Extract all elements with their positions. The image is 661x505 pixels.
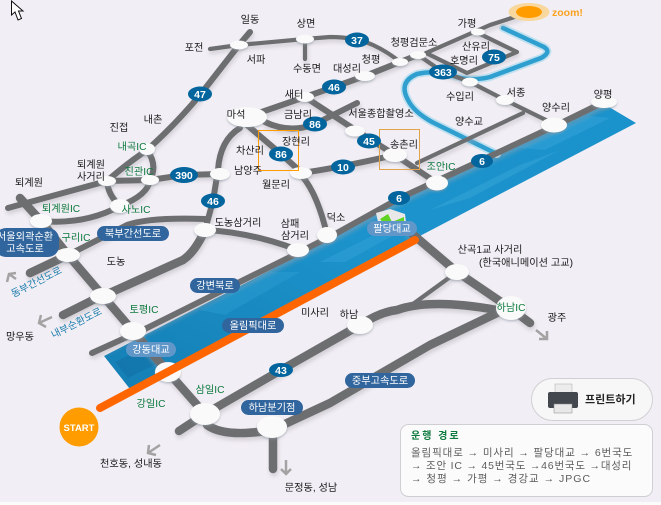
icon: Paldang bridge green marker — [376, 209, 406, 229]
place labels: 가평 — [458, 18, 476, 30]
road name pills: 중부고속도로 — [352, 375, 408, 387]
junctions — [30, 28, 617, 438]
place labels: 서종 — [507, 87, 525, 99]
route number badges: 37 — [351, 35, 363, 47]
direction arrows — [7, 273, 547, 474]
expressway labels: 내부순환도로 — [49, 305, 104, 341]
expressway labels — [9, 264, 104, 341]
road name pills: 팔당대교 — [373, 223, 411, 235]
place labels: 상면 — [297, 18, 315, 30]
place labels: 송촌리 — [390, 139, 418, 151]
road name pills: 올림픽대로 — [230, 320, 276, 332]
place labels: 청평검문소 — [391, 37, 437, 49]
place labels: 월문리 — [262, 179, 290, 191]
route number badges: 363 — [434, 67, 452, 79]
place labels: 진접 — [110, 122, 128, 134]
place labels: 망우동 — [6, 331, 34, 343]
interchange labels: 삼일IC — [196, 384, 224, 396]
route info box — [400, 424, 652, 496]
interchange labels: 조안IC — [427, 161, 455, 173]
place labels: 사거리 — [77, 171, 105, 183]
place labels: 양평 — [594, 89, 612, 101]
route line: Olympic-daero orange route — [100, 240, 415, 408]
place labels: 산유리 — [462, 41, 490, 53]
place labels: 수입리 — [446, 90, 474, 103]
route info box: → 조안 IC → 45번국도 →46번국도 →대성리 — [411, 460, 632, 472]
place labels: 금남리 — [284, 109, 312, 121]
route number badges: 6 — [479, 156, 485, 168]
place labels: 도농 — [107, 256, 125, 268]
road name pills: 북부간선도로 — [105, 228, 161, 240]
place labels: 차산리 — [236, 145, 264, 157]
place labels: 삼패 — [281, 218, 299, 230]
start marker: START — [64, 423, 95, 434]
medium roads — [8, 32, 604, 353]
interchange labels — [42, 141, 525, 410]
river: Han river — [104, 104, 636, 389]
route number badges: 75 — [488, 52, 500, 64]
place labels: 미사리 — [301, 307, 329, 319]
interchange labels: 강일IC — [137, 398, 165, 410]
place labels: (한국애니메이션 고교) — [479, 257, 573, 269]
wide roads — [20, 198, 530, 469]
road name pills: 강동대교 — [132, 344, 170, 356]
road name pills: 고속도로 — [6, 243, 44, 255]
route number badges: 10 — [337, 162, 349, 174]
route number badges: 46 — [328, 82, 340, 94]
highlight boxes — [258, 130, 420, 170]
place labels: 덕소 — [327, 212, 345, 224]
place labels: 청평 — [362, 54, 380, 66]
route info box: 운행 경로 — [411, 430, 461, 442]
place labels: 장현리 — [282, 136, 310, 148]
interchange labels: 퇴계원IC — [42, 203, 80, 215]
place labels: 천호동, 성내동 — [100, 458, 162, 470]
place labels: 대성리 — [333, 63, 361, 75]
river: Bukhan tributary — [405, 28, 547, 154]
interchange labels: 토평IC — [130, 304, 158, 316]
place labels: 포전 — [185, 42, 203, 54]
place labels: 양수교 — [455, 116, 483, 128]
interchange labels: 하남IC — [497, 301, 525, 314]
interchange labels: 진관IC — [125, 166, 153, 178]
route number badges: 47 — [194, 89, 206, 101]
interchange labels: 구리IC — [62, 232, 90, 244]
interchange labels: 사노IC — [122, 204, 150, 216]
place labels: 서파 — [247, 54, 266, 66]
route number badges: 390 — [175, 170, 193, 182]
place labels: 내촌 — [144, 114, 162, 126]
place labels: 양수리 — [542, 102, 570, 114]
route number badges — [170, 32, 506, 377]
print button — [532, 378, 652, 420]
route number badges: 43 — [275, 365, 287, 377]
route number badges: 45 — [363, 136, 375, 148]
icon: mouse cursor — [12, 1, 23, 20]
place labels: 퇴계원 — [15, 177, 43, 189]
place labels: 서울종합촬영소 — [348, 108, 414, 120]
place labels: 산곡1교 사거리 — [458, 244, 522, 256]
road name pills — [0, 221, 417, 415]
route number badges: 86 — [309, 119, 321, 131]
route info box: → 청평 → 가평 → 경강교 → JPGC — [411, 472, 591, 485]
road name pills: 강변북로 — [196, 280, 234, 292]
place labels: 마석 — [227, 109, 245, 121]
place labels: 퇴계원 — [77, 159, 105, 171]
route number badges: 86 — [275, 149, 287, 161]
zoom marker: zoom! — [552, 7, 583, 19]
place labels: 남양주 — [234, 165, 262, 177]
place labels: 수동면 — [293, 63, 321, 75]
route info box: 올림픽대로 → 미사리 → 팔당대교 → 6번국도 — [411, 447, 633, 459]
place labels: 일동 — [241, 14, 259, 26]
zoom marker — [508, 3, 583, 21]
place labels: 호명리 — [450, 55, 478, 67]
start marker — [60, 408, 98, 446]
place labels: 삼거리 — [281, 230, 309, 242]
route number badges: 46 — [207, 196, 219, 208]
place labels: 도농삼거리 — [215, 217, 261, 229]
thin roads — [210, 12, 554, 304]
expressway labels: 동부간선도로 — [9, 264, 64, 300]
place labels: 문정동, 성남 — [285, 482, 338, 494]
place labels: 광주 — [548, 312, 566, 324]
road name pills: 하남분기점 — [249, 401, 295, 414]
icon: printer — [548, 384, 578, 413]
interchange labels: 내곡IC — [118, 141, 146, 153]
place labels: 하남 — [340, 308, 359, 321]
route number badges: 6 — [396, 193, 402, 205]
place labels: 새터 — [285, 89, 303, 101]
print button: 프린트하기 — [585, 392, 636, 406]
